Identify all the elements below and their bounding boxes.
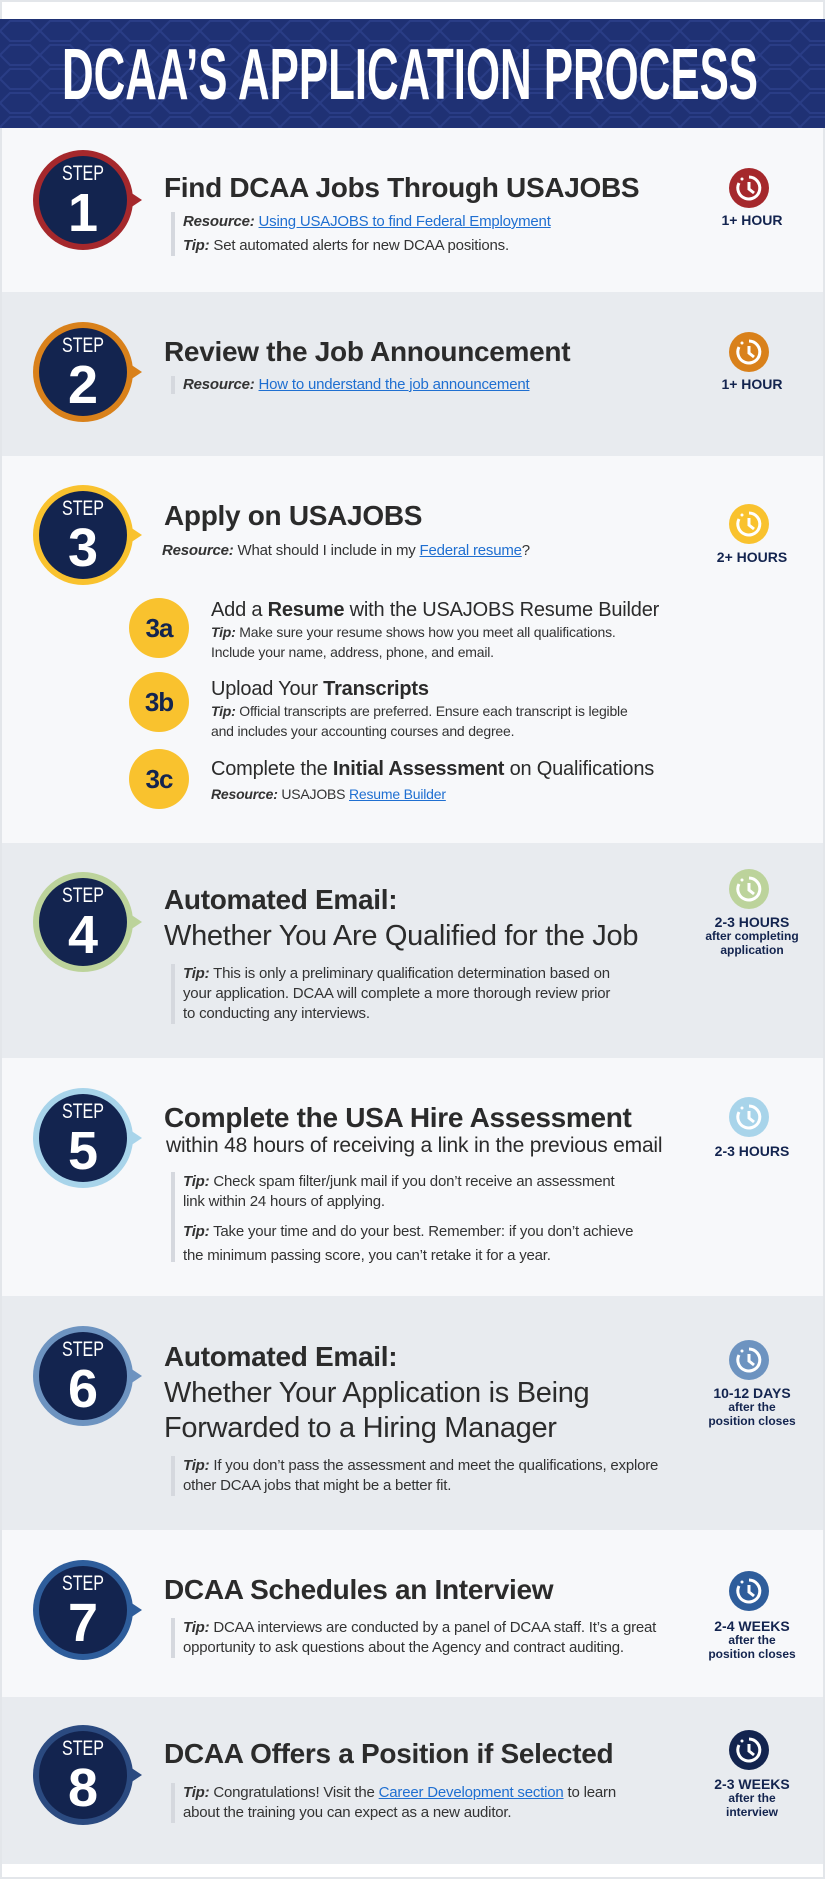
time label: 1+ HOUR (721, 376, 783, 392)
heading: Automated Email: (164, 884, 397, 915)
step badge 7: STEP (62, 1572, 104, 1595)
time label: after completing (705, 929, 799, 943)
heading: Apply on USAJOBS (164, 500, 422, 531)
header banner (0, 19, 825, 128)
heading (164, 1102, 662, 1157)
substep 3a: Add a Resume with the USAJOBS Resume Builder (211, 599, 659, 621)
substep 3a: Include your name, address, phone, and email. (211, 644, 494, 660)
time label (708, 1618, 796, 1661)
time label: after the (728, 1791, 776, 1805)
heading (164, 884, 638, 952)
heading: Whether Your Application is Being (164, 1377, 589, 1409)
substep 3b: Tip: Official transcripts are preferred. Ensure each transcript is legible (211, 703, 628, 719)
step badge 4: STEP (62, 884, 104, 907)
icon: clock (729, 504, 769, 544)
icon: clock (729, 168, 769, 208)
panel: step 1 (2, 128, 823, 292)
step badge 6: STEP (62, 1338, 104, 1361)
icon: clock (729, 1340, 769, 1380)
step badge 7: 7 (68, 1593, 98, 1653)
panel: step 7 (2, 1530, 823, 1697)
icon: clock (729, 869, 769, 909)
time label: 10-12 DAYS (713, 1385, 791, 1401)
text block: your application. DCAA will complete a more thorough review prior (183, 985, 610, 1002)
heading: Find DCAA Jobs Through USAJOBS (164, 172, 639, 203)
step badge 6: 6 (68, 1359, 98, 1419)
step badge 1: 1 (68, 183, 98, 243)
text block: Tip: Set automated alerts for new DCAA positions. (183, 237, 509, 254)
substep 3a: Tip: Make sure your resume shows how you meet all qualifications. (211, 624, 616, 640)
time label: position closes (708, 1647, 796, 1661)
time label: position closes (708, 1414, 796, 1428)
substep 3b: Upload Your Transcripts (211, 678, 429, 700)
time label: 2-4 WEEKS (714, 1618, 790, 1634)
step badge 1 (33, 150, 142, 250)
heading: within 48 hours of receiving a link in the previous email (166, 1134, 662, 1157)
text block: Resource: How to understand the job announcement (183, 376, 529, 393)
time label (714, 1776, 790, 1819)
icon: clock (729, 1571, 769, 1611)
step badge 5: STEP (62, 1100, 104, 1123)
text block (183, 1173, 633, 1264)
step badge 8 (33, 1725, 142, 1825)
substep 3c: Resource: USAJOBS Resume Builder (211, 786, 446, 802)
step badge 2: 2 (68, 355, 98, 415)
substep 3c: Complete the Initial Assessment on Qualifications (211, 758, 654, 780)
substep 3c: 3c (146, 764, 172, 794)
time label: after the (728, 1400, 776, 1414)
panel: step 4 (2, 843, 823, 1058)
text block (183, 1784, 616, 1821)
heading: Automated Email: (164, 1341, 397, 1372)
substep 3b: 3b (145, 687, 173, 717)
time label (708, 1385, 796, 1428)
step badge 2: STEP (62, 334, 104, 357)
step badge 5: 5 (68, 1121, 98, 1181)
text block: to conducting any interviews. (183, 1005, 370, 1022)
heading: DCAA Schedules an Interview (164, 1574, 553, 1605)
text block (183, 965, 610, 1022)
time label: application (720, 943, 784, 957)
text block: Tip: Check spam filter/junk mail if you don’t receive an assessment (183, 1173, 615, 1190)
heading: Forwarded to a Hiring Manager (164, 1412, 557, 1444)
icon: clock (729, 332, 769, 372)
step badge 6 (33, 1326, 142, 1426)
substep 3c (129, 749, 654, 809)
panel: step 8 (2, 1697, 823, 1864)
step badge 3 (33, 485, 142, 585)
icon: clock (729, 1730, 769, 1770)
step badge 3: STEP (62, 497, 104, 520)
text block: Resource: What should I include in my Federal resume? (162, 542, 530, 559)
time label (705, 914, 799, 957)
substep 3b (129, 672, 628, 739)
text block: Tip: This is only a preliminary qualification determination based on (183, 965, 610, 982)
time label: 2+ HOURS (717, 549, 787, 565)
heading: Review the Job Announcement (164, 336, 570, 367)
substep 3a: 3a (146, 613, 172, 643)
time label: 2-3 WEEKS (714, 1776, 790, 1792)
time label: 1+ HOUR (721, 212, 783, 228)
step badge 1: STEP (62, 162, 104, 185)
panel: step 2 (2, 292, 823, 456)
panel: step 3 (2, 456, 823, 843)
text block (183, 1619, 656, 1656)
text block: Tip: If you don’t pass the assessment and meet the qualifications, explore (183, 1457, 658, 1474)
heading (164, 1341, 589, 1444)
icon: clock (729, 1097, 769, 1137)
text block: other DCAA jobs that might be a better fit. (183, 1477, 451, 1494)
step badge 4 (33, 872, 142, 972)
time label: 2-3 HOURS (715, 1143, 789, 1159)
text block: link within 24 hours of applying. Tip: Take your time and do your best. Remember: if you don’t achieve (183, 1193, 633, 1240)
step badge 7 (33, 1560, 142, 1660)
heading: DCAA Offers a Position if Selected (164, 1738, 613, 1769)
heading: Whether You Are Qualified for the Job (164, 920, 638, 952)
text block: opportunity to ask questions about the Agency and contract auditing. (183, 1639, 624, 1656)
step badge 2 (33, 322, 142, 422)
step badge 4: 4 (68, 905, 98, 965)
text block: about the training you can expect as a new auditor. (183, 1804, 511, 1821)
panel: step 6 (2, 1296, 823, 1530)
text block: Tip: Congratulations! Visit the Career Development section to learn (183, 1784, 616, 1801)
text block: Tip: DCAA interviews are conducted by a panel of DCAA staff. It’s a great (183, 1619, 656, 1636)
step badge 3: 3 (68, 518, 98, 578)
text block: Resource: Using USAJOBS to find Federal Employment (183, 213, 551, 230)
text block: the minimum passing score, you can’t retake it for a year. (183, 1247, 551, 1264)
time label: after the (728, 1633, 776, 1647)
substep 3a (129, 598, 659, 660)
panel: step 5 (2, 1058, 823, 1296)
step badge 8: 8 (68, 1758, 98, 1818)
time label: interview (726, 1805, 778, 1819)
time label: 2-3 HOURS (715, 914, 789, 930)
step badge 5 (33, 1088, 142, 1188)
substep 3b: and includes your accounting courses and degree. (211, 723, 514, 739)
text block (183, 213, 551, 254)
heading: Complete the USA Hire Assessment (164, 1102, 632, 1133)
step badge 8: STEP (62, 1737, 104, 1760)
text block (183, 1457, 658, 1494)
